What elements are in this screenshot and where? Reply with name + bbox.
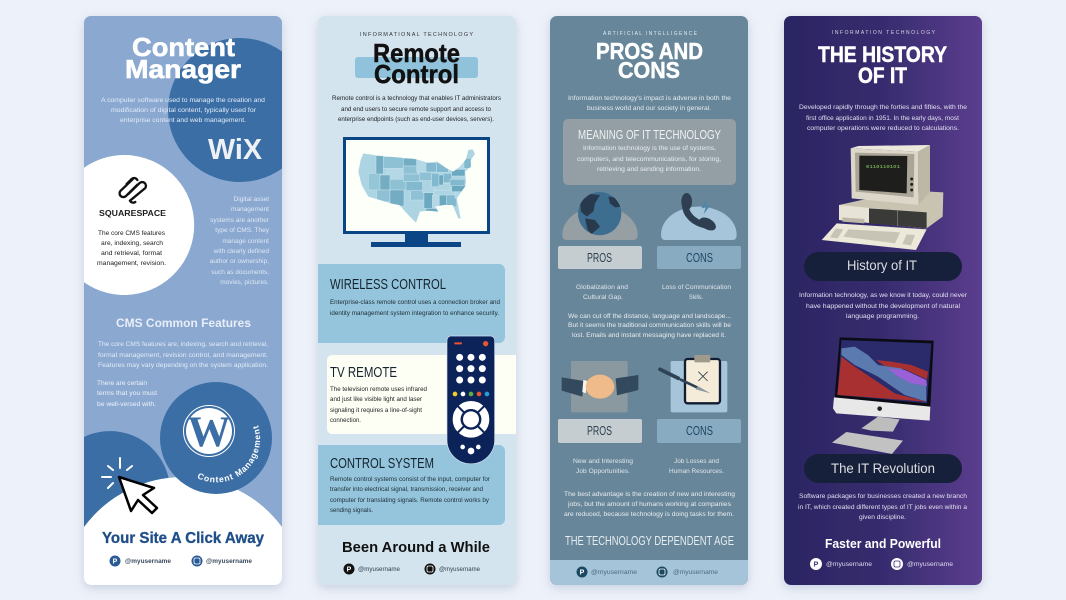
right text block: with clearly defined [213,248,269,255]
section: tv remote: signaling it requires a line-of-sight [330,407,422,414]
icon: retro computer [822,145,943,250]
body text: language programming. [846,313,919,320]
intro text: modification of digital content, typically used for [111,107,257,114]
box: meaning of IT technology [563,119,736,185]
section: wireless control [318,264,505,343]
label: pros [558,246,642,269]
closing text: The best advantage is the creation of new and interesting [564,491,735,498]
section: wireless control: Enterprise-class remote control uses a connection broker and [330,299,500,306]
pros text: New and Interesting [573,458,633,465]
middle text: We can cut off the distance, language and landscape... [568,313,731,320]
box: meaning of IT technology: computers, and telecommunications, for storing, [577,156,721,163]
features text: format management, revision control, and management. [98,352,268,359]
section: wireless control: identity management system integration to enhance security. [330,310,499,317]
title: Manager [125,54,241,84]
section: wireless control: WIRELESS CONTROL [330,276,446,293]
title: Remote [373,38,460,68]
monitor with US map [344,138,488,247]
panel: pros and cons [550,16,748,585]
right text block: such as documents, [211,269,269,276]
section: control system: sending signals. [330,507,373,514]
squarespace text: are, indexing, search [101,240,163,247]
icon: cursor click [102,458,157,513]
terms text: be well-versed with. [97,401,156,408]
pill: the IT revolution [804,454,962,483]
social handles: @myusername [206,558,252,565]
features text: Features may vary depending on the system application. [98,362,268,369]
terms text: There are certain [97,380,147,387]
title [373,38,460,89]
heading: faster and powerful: Faster and Powerful [825,536,941,551]
title: THE HISTORY [818,42,947,67]
intro text: A computer software used to manage the creation and [101,97,265,104]
title highlight [355,57,478,78]
intro text: Developed rapidly through the forties and fifties, with the [799,104,967,111]
dark blue hump [84,431,168,527]
heading: been around a while: Been Around a While [342,540,490,556]
body text [799,292,968,320]
eyebrow: INFORMATION TECHNOLOGY [832,30,936,36]
eyebrow: ARTIFICIAL INTELLIGENCE [603,31,698,37]
social handles: P [113,558,118,566]
intro text [332,95,502,123]
label: cons [657,419,741,443]
wordpress circle: Content Management [198,425,260,482]
body text: given discipline. [859,514,906,521]
box: meaning of IT technology: Information technology is the use of systems, [583,145,716,152]
icon: phone on dome [661,193,737,240]
section: control system: computer for translating signals. Remote control works by [330,497,490,504]
panel: history of IT [784,16,982,585]
section: control system: CONTROL SYSTEM [330,455,434,472]
social handles: @myusername [591,569,637,576]
terms text [97,380,157,408]
right text block: manage content [222,238,269,245]
right text block: Digital asset [234,196,269,203]
body text: have happened without the development of natural [806,303,961,310]
footer band [550,560,748,585]
wordpress circle [160,382,272,494]
squarespace text: management, revision. [97,260,166,267]
section: tv remote: connection. [330,417,361,424]
squarespace text: The core CMS features [98,230,166,237]
section: control system [318,445,505,525]
social handles: P [580,570,585,576]
intro text: Remote control is a technology that enables IT administrators [332,95,502,102]
panel: remote control [318,16,516,585]
section: tv remote: The television remote uses infrared [330,386,427,393]
icon: squarespace logo [120,178,146,203]
social handles: @myusername [125,558,171,565]
intro text [101,97,265,124]
title: OF IT [858,63,907,88]
intro text: enterprise content and web management. [120,117,246,124]
wordpress circle: W [188,409,230,456]
pros text: Job Opportunities. [576,468,630,475]
social handles [576,566,718,578]
label: cons: CONS [686,423,713,438]
title: Content [132,32,235,62]
intro text: business world and our society in general. [587,105,711,112]
features text [98,341,268,369]
icon: handshake [562,361,638,412]
middle text: But it seems the traditional communication skills will be [568,322,731,329]
dark blue circle [168,38,282,182]
right text block: management [231,206,269,213]
middle text [568,313,731,339]
section: tv remote [327,355,516,434]
cons text: Loss of Communication [662,284,731,291]
icon: globe on dome [562,192,638,240]
social handles: @myusername [826,561,872,568]
heading: the technology dependent age: THE TECHNOLOGY DEPENDENT AGE [565,533,734,548]
intro text: computer operations were reduced to calculations. [807,125,959,132]
title [596,38,703,83]
title: Control [374,59,459,89]
social handles: @myusername [439,566,480,573]
intro text [568,95,731,112]
pill: history of IT: History of IT [847,257,917,273]
closing text: jobs, but the amount of humans working at companies [567,501,732,508]
social handles: @myusername [673,569,718,576]
social handles: P [814,562,819,568]
section: control system: Remote control systems consist of the input, computer for [330,476,491,483]
social handles [344,564,480,574]
white hump [84,477,282,585]
right text block: systems are another [210,217,270,224]
right text block: author or ownership, [210,258,269,265]
pros text: Cultural Gap. [583,294,623,301]
pill: the IT revolution: The IT Revolution [831,460,935,476]
social handles [810,558,953,570]
heading: cms common features: CMS Common Features [116,316,251,330]
wix logo: WiX [208,134,263,166]
body text: Software packages for businesses created a new branch [799,493,967,500]
body text [798,493,967,521]
intro text [799,104,967,132]
cons text: Skills. [689,294,703,301]
pros text [573,458,633,475]
icon: clipboard and pen [660,355,727,412]
body text: Information technology, as we know it today, could never [799,292,968,299]
title [818,42,947,88]
label: pros: PROS [587,250,612,265]
section: tv remote: and just like visible light and laser [330,396,423,403]
white circle [84,155,194,295]
cons text: Job Losses and [674,458,719,465]
right text block: type of CMS. They [215,227,270,234]
box: meaning of IT technology: retrieving and sending information. [597,166,701,173]
cons text [662,284,731,301]
social handles: @myusername [358,566,400,573]
eyebrow: INFORMATIONAL TECHNOLOGY [360,32,473,38]
intro text: enterprise endpoints (such as end-user devices, servers). [338,116,494,123]
title [125,32,241,84]
heading: your site a click away: Your Site A Click Away [102,530,264,547]
intro text: and end users to secure remote support and access to [341,106,491,113]
social handles: @myusername [907,561,953,568]
squarespace text [97,209,167,267]
section: tv remote: TV REMOTE [330,364,397,381]
panel: content manager [80,15,286,592]
right text block: movies, pictures. [220,279,269,286]
cons text [669,458,724,475]
icon: retro computer: 0110110101 [866,164,900,170]
intro text: Information technology's impact is adverse in both the [568,95,731,102]
label: pros: PROS [587,423,612,438]
squarespace text: and retrieval, format [101,250,162,257]
icon: imac [832,337,934,454]
features text: The core CMS features are, indexing, search and retrieval, [98,341,268,348]
closing text [564,491,735,518]
social handles [110,556,252,566]
label: cons [657,246,741,269]
closing text: are reduced, because technology is doing tasks for them. [564,511,734,518]
body text: in IT, which created different types of IT jobs even within a [798,504,967,511]
social handles: P [347,566,352,574]
title: PROS AND [596,38,703,64]
label: pros [558,419,642,443]
right text block [210,196,270,286]
pros text: Globalization and [576,284,628,291]
squarespace text: SQUARESPACE [99,209,167,218]
label: cons: CONS [686,250,713,265]
terms text: terms that you must [97,390,157,397]
box: meaning of IT technology: MEANING OF IT TECHNOLOGY [578,127,721,142]
section: control system: transfer into electrical signal, transmission, receiver and [330,486,483,493]
intro text: first office application in 1951. In the early days, most [806,115,959,122]
title: CONS [618,57,680,83]
pros text [576,284,628,301]
icon: tv remote [447,336,495,464]
cons text: Human Resources. [669,468,724,475]
pill: history of IT [804,252,962,281]
middle text: lost. Emails and instant messaging have replaced it. [572,332,726,339]
